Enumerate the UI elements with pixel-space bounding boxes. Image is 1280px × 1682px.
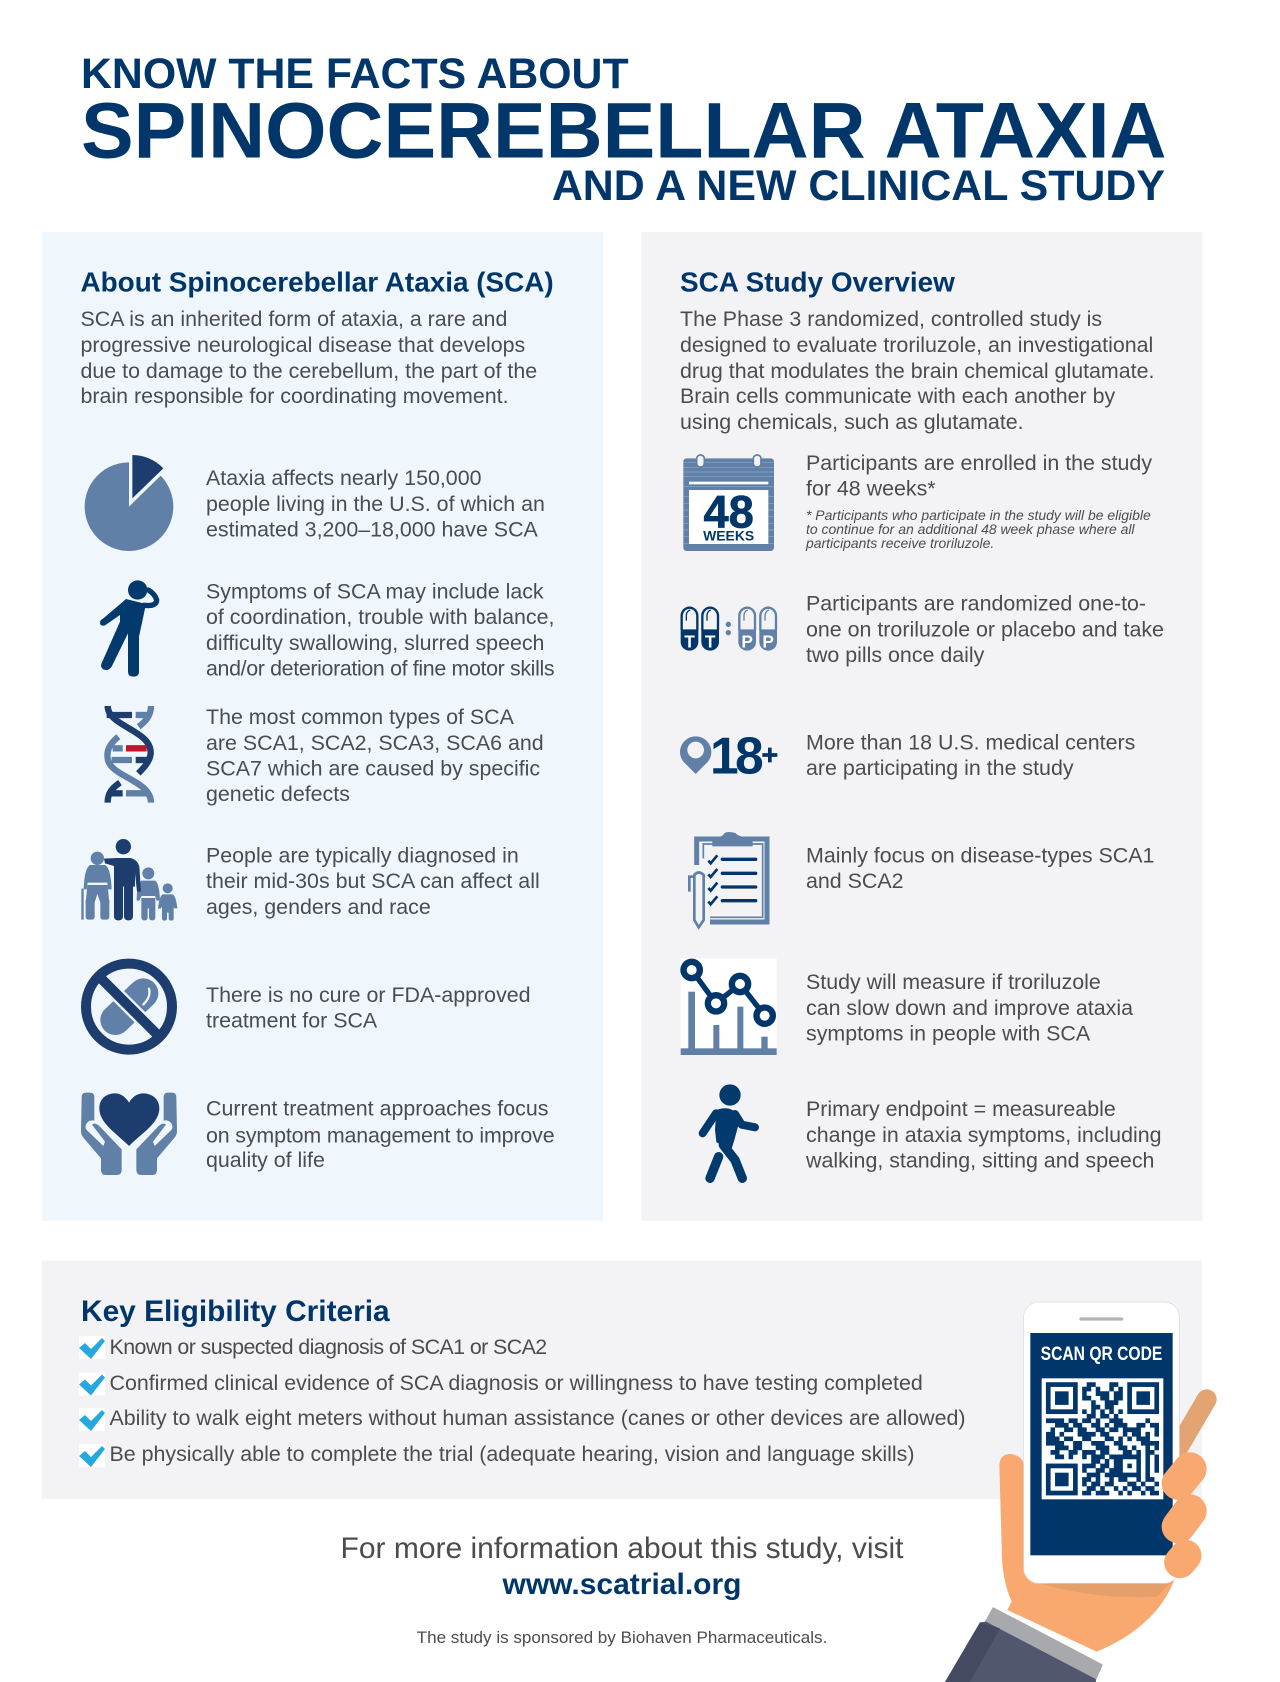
check and criterion 1: Known or suspected diagnosis of SCA1 or SCA2 xyxy=(110,1335,547,1359)
text: treatment approaches: quality of life xyxy=(206,1148,325,1172)
text: common types: are SCA1, SCA2, SCA3, SCA6 and xyxy=(206,731,544,755)
title: AND A NEW CLINICAL STUDY xyxy=(552,162,1165,210)
icon: clipboard checklist xyxy=(689,833,767,927)
sleeve xyxy=(945,1608,1102,1682)
title: SPINOCEREBELLAR ATAXIA xyxy=(81,86,1167,174)
text: medical centers: are participating in the study xyxy=(806,756,1074,780)
text: SCA intro: progressive neurological disease that develops xyxy=(80,333,525,357)
text: study intro: The Phase 3 randomized, controlled study is xyxy=(680,307,1102,331)
heading: about SCA: About Spinocerebellar Ataxia (SCA) xyxy=(80,266,554,298)
icon: pills one to one xyxy=(681,608,777,651)
text: diagnosis age: People are typically diagnosed in xyxy=(206,844,519,868)
icon: map pin 18 plus xyxy=(680,726,777,784)
check and criterion 2: Confirmed clinical evidence of SCA diagnosis or willingness to have testing completed xyxy=(110,1371,923,1395)
icon: line and bar chart xyxy=(681,958,777,1055)
text: medical centers: More than 18 U.S. medical centers xyxy=(806,730,1135,754)
text: diagnosis age: their mid-30s but SCA can affect all xyxy=(206,869,540,893)
text: primary endpoint: change in ataxia symptoms, including xyxy=(806,1123,1162,1147)
text: randomization: one on troriluzole or placebo and take xyxy=(806,617,1164,641)
text: footnote: participants receive troriluzole. xyxy=(805,535,994,551)
text: prevalence: people living in the U.S. of which an xyxy=(206,492,545,516)
check and criterion 4: Be physically able to complete the trial (adequate hearing, vision and language skills) xyxy=(110,1442,915,1466)
text: study intro: drug that modulates the brain chemical glutamate. xyxy=(680,359,1154,383)
text: randomization: Participants are randomized one-to- xyxy=(806,592,1146,616)
text: treatment approaches: on symptom management to improve xyxy=(206,1124,555,1148)
text: SCA intro: due to damage to the cerebellum, the part of the xyxy=(80,359,537,383)
icon: pills one to one: P xyxy=(741,631,753,651)
text: common types: SCA7 which are caused by specific xyxy=(206,756,540,780)
icon: calendar 48 weeks xyxy=(683,455,774,551)
icon: pills one to one: T xyxy=(705,631,716,651)
text: measures: symptoms in people with SCA xyxy=(806,1022,1091,1046)
footer call to action: www.scatrial.org xyxy=(502,1568,741,1601)
text: study intro: using chemicals, such as glutamate. xyxy=(680,410,1024,434)
icon: DNA helix xyxy=(107,706,151,803)
text: SCA intro: brain responsible for coordinating movement. xyxy=(80,384,509,408)
check and criterion 3: Ability to walk eight meters without human assistance (canes or other devices are allowed) xyxy=(110,1406,966,1430)
text: symptoms: and/or deterioration of fine motor skills xyxy=(206,657,555,681)
icon: hands holding heart xyxy=(81,1093,177,1175)
heading: study overview: SCA Study Overview xyxy=(680,266,955,298)
icon: pills one to one: P xyxy=(762,631,774,651)
text: measures: Study will measure if troriluzole xyxy=(806,970,1101,994)
footer call to action: For more information about this study, visit xyxy=(340,1532,904,1565)
text: no cure: treatment for SCA xyxy=(206,1009,378,1033)
text: primary endpoint: walking, standing, sitting and speech xyxy=(805,1148,1154,1172)
icon: pie chart xyxy=(85,455,173,551)
text: symptoms: of coordination, trouble with balance, xyxy=(206,605,554,629)
text: SCA intro: SCA is an inherited form of ataxia, a rare and xyxy=(80,307,507,331)
text: prevalence: Ataxia affects nearly 150,000 xyxy=(206,466,482,490)
text: footnote: * Participants who participate in the study will be eligible xyxy=(806,507,1151,523)
icon: map pin 18 plus: 18 xyxy=(710,726,763,784)
text: prevalence: estimated 3,200–18,000 have SCA xyxy=(206,518,539,542)
icon: calendar 48 weeks: 48 xyxy=(703,487,754,538)
text: symptoms: Symptoms of SCA may include lack xyxy=(206,580,544,604)
icon: pills one to one: T xyxy=(684,631,695,651)
text: disease types: Mainly focus on disease-types SCA1 xyxy=(806,844,1154,868)
illustration: hand holding phone with QR code xyxy=(945,1302,1207,1682)
text: enrollment duration: Participants are enrolled in the study xyxy=(806,451,1152,475)
panel: about spinocerebellar ataxia xyxy=(42,232,603,1221)
icon: no pill xyxy=(86,964,172,1050)
title: KNOW THE FACTS ABOUT xyxy=(81,50,629,98)
heading: eligibility: Key Eligibility Criteria xyxy=(81,1295,390,1328)
text: study intro: designed to evaluate troriluzole, an investigational xyxy=(680,333,1153,357)
text: common types: genetic defects xyxy=(206,782,350,806)
icon: walking person xyxy=(703,1084,755,1178)
text: common types: The most common types of SCA xyxy=(206,705,515,729)
icon: person holding head xyxy=(100,580,157,677)
text: no cure: There is no cure or FDA-approved xyxy=(206,983,531,1007)
text: study intro: Brain cells communicate with each another by xyxy=(680,384,1115,408)
text: disease types: and SCA2 xyxy=(806,869,904,893)
panel: SCA study overview xyxy=(642,232,1202,1221)
text: footnote: to continue for an additional 48 week phase where all xyxy=(806,521,1135,537)
footer call to action xyxy=(340,1532,904,1647)
panel: key eligibility criteria xyxy=(42,1260,1202,1499)
text: symptoms: difficulty swallowing, slurred speech xyxy=(206,631,544,655)
fingers xyxy=(1178,1469,1190,1562)
text: treatment approaches: Current treatment approaches focus xyxy=(206,1097,548,1121)
icon: calendar 48 weeks: WEEKS xyxy=(703,527,754,543)
text: primary endpoint: Primary endpoint = measureable xyxy=(806,1097,1116,1121)
text: enrollment duration: for 48 weeks* xyxy=(806,476,936,500)
icon: family of four xyxy=(81,839,177,921)
title xyxy=(81,50,1167,210)
text: measures: can slow down and improve ataxia xyxy=(806,996,1133,1020)
text: randomization: two pills once daily xyxy=(806,643,985,667)
phone: SCAN QR CODE xyxy=(1041,1344,1162,1365)
text: diagnosis age: ages, genders and race xyxy=(206,895,431,919)
QR code xyxy=(1046,1385,1159,1493)
sponsor note: The study is sponsored by Biohaven Pharmaceuticals. xyxy=(417,1628,827,1647)
phone xyxy=(1024,1302,1179,1583)
